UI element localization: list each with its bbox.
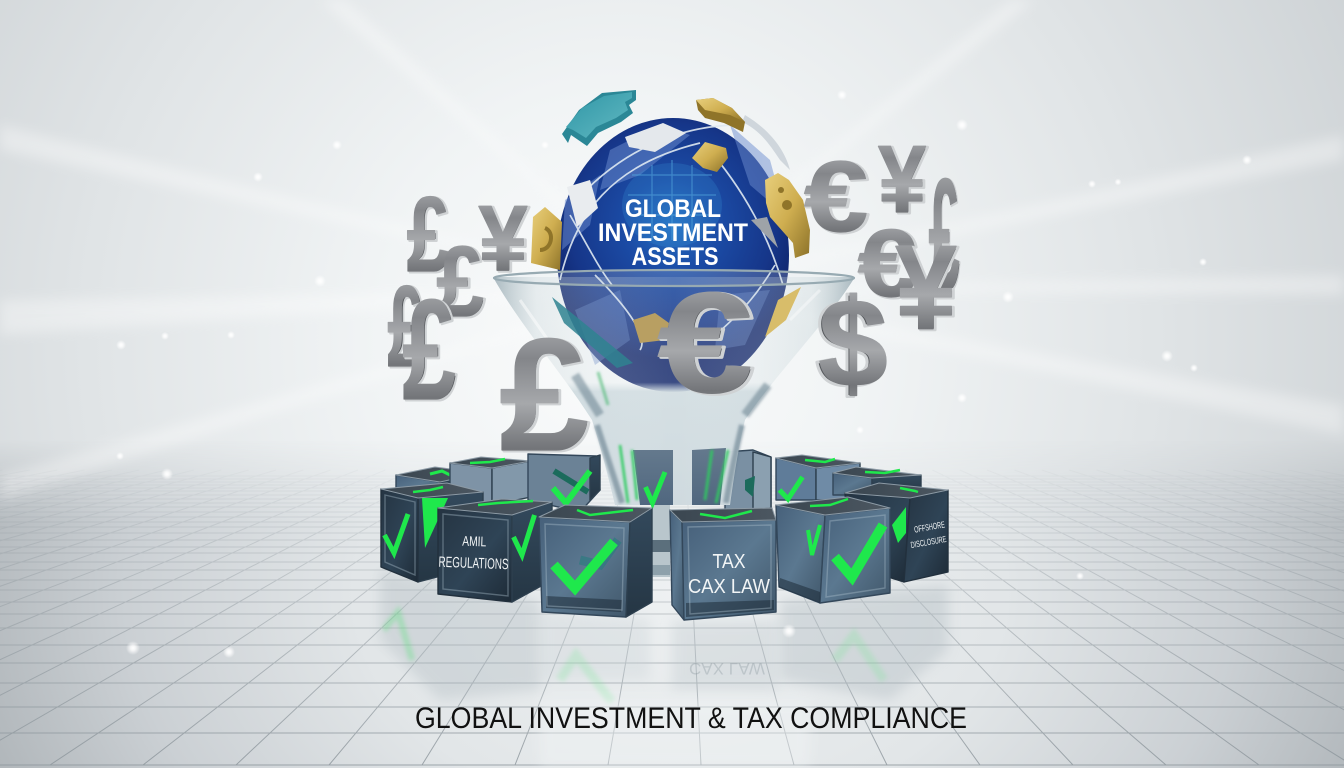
cube: back far right	[833, 467, 921, 495]
currency symbols: left cluster	[387, 175, 590, 485]
globe title text: GLOBAL	[625, 195, 721, 223]
funnel stem	[652, 505, 670, 577]
symbol: yen left: ¥	[480, 188, 530, 292]
symbol: pound lower: £	[404, 271, 458, 431]
symbol: euro mid right: €	[858, 210, 916, 317]
symbol: yen upper right: ¥	[880, 127, 928, 234]
globe lighter map patches	[562, 125, 785, 250]
symbol: euro upper right: €	[806, 141, 870, 253]
symbol: euro large: €	[660, 264, 756, 424]
cube: back centre right	[725, 450, 771, 510]
cube: back centre left with check	[528, 454, 600, 512]
cube: back right with check	[776, 455, 860, 500]
funnel rim	[494, 270, 854, 286]
symbol: yen large right: ¥	[895, 222, 957, 355]
cube: far left with check	[381, 483, 483, 582]
currency symbols: centre and right cluster	[657, 126, 961, 424]
symbol: pound top: £	[407, 175, 449, 294]
cube: AML regulations	[438, 499, 552, 602]
symbol: pound top: £	[409, 176, 451, 295]
symbol: euro upper right: €	[804, 140, 868, 252]
icon: gold piece centre	[692, 142, 728, 172]
cube: tax law	[670, 508, 776, 620]
symbol: pound back: £	[387, 262, 423, 391]
icon: gold piece top	[696, 98, 745, 132]
symbol: dollar: $	[818, 274, 888, 413]
symbol: sliver side-on pound: £	[929, 147, 961, 326]
cube label: AML regulations	[438, 532, 510, 573]
symbol: sliver side-on pound: £	[928, 146, 960, 325]
globe title text: INVESTMENT	[598, 219, 748, 247]
symbol: yen upper right: ¥	[878, 126, 926, 233]
symbol: pound middle: £	[436, 225, 484, 338]
floor grid	[0, 470, 1344, 765]
cube label: tax law: TAX	[712, 551, 746, 573]
cube: right with large check	[776, 497, 890, 603]
cube: far right with offshore disclosure label	[845, 483, 948, 582]
symbol: pound large: £	[502, 306, 590, 485]
symbol: pound middle: £	[438, 226, 486, 339]
globe title text	[598, 195, 748, 271]
light rays	[0, 0, 1344, 500]
teal and gold pieces seen through glass	[552, 297, 633, 368]
symbol: dollar: $	[815, 275, 885, 414]
symbol: pound large: £	[500, 305, 588, 484]
cube label: AML regulations: AMIL	[462, 533, 487, 549]
sparkles	[116, 90, 1252, 658]
globe title text: ASSETS	[632, 243, 718, 271]
cube: centre left with large check	[539, 505, 652, 617]
globe central grid glow	[622, 160, 722, 247]
symbol: euro mid right: €	[860, 211, 918, 318]
cube: far right with offshore disclosure label: OFFSHORE	[913, 519, 946, 535]
cube reflections on floor	[380, 570, 948, 768]
cube: back left	[450, 457, 531, 505]
icon: teal gear	[562, 90, 636, 146]
cube label: tax law	[688, 551, 770, 598]
funnel inner blue blocks	[633, 450, 673, 505]
cube label: AML regulations: REGULATIONS	[438, 554, 509, 573]
title: GLOBAL INVESTMENT & TAX COMPLIANCE	[415, 702, 967, 735]
back row of glass cubes	[396, 450, 921, 512]
symbol: pound back: £	[389, 263, 425, 392]
symbol: yen large right: ¥	[897, 223, 959, 356]
cube: back far left	[396, 467, 481, 495]
funnel streaks	[575, 372, 768, 503]
symbol: pound lower: £	[402, 270, 456, 430]
globe meridian arcs	[560, 125, 783, 350]
front row of glass cubes	[381, 483, 948, 620]
icon: gold gear right	[765, 173, 810, 258]
gears orbiting globe	[531, 90, 810, 270]
cube: far right with offshore disclosure label: DISCLOSURE	[910, 534, 947, 550]
symbol: euro large: €	[657, 263, 753, 423]
cube label: tax law: CAX LAW	[688, 576, 770, 598]
symbol: yen left: ¥	[478, 187, 528, 291]
icon: gold piece left	[531, 207, 562, 270]
globe: global investment assets	[557, 115, 790, 392]
cube reflections on floor: CAX LAW	[689, 659, 765, 678]
globe silver arrows	[567, 115, 790, 248]
funnel glass bowl	[493, 270, 855, 505]
